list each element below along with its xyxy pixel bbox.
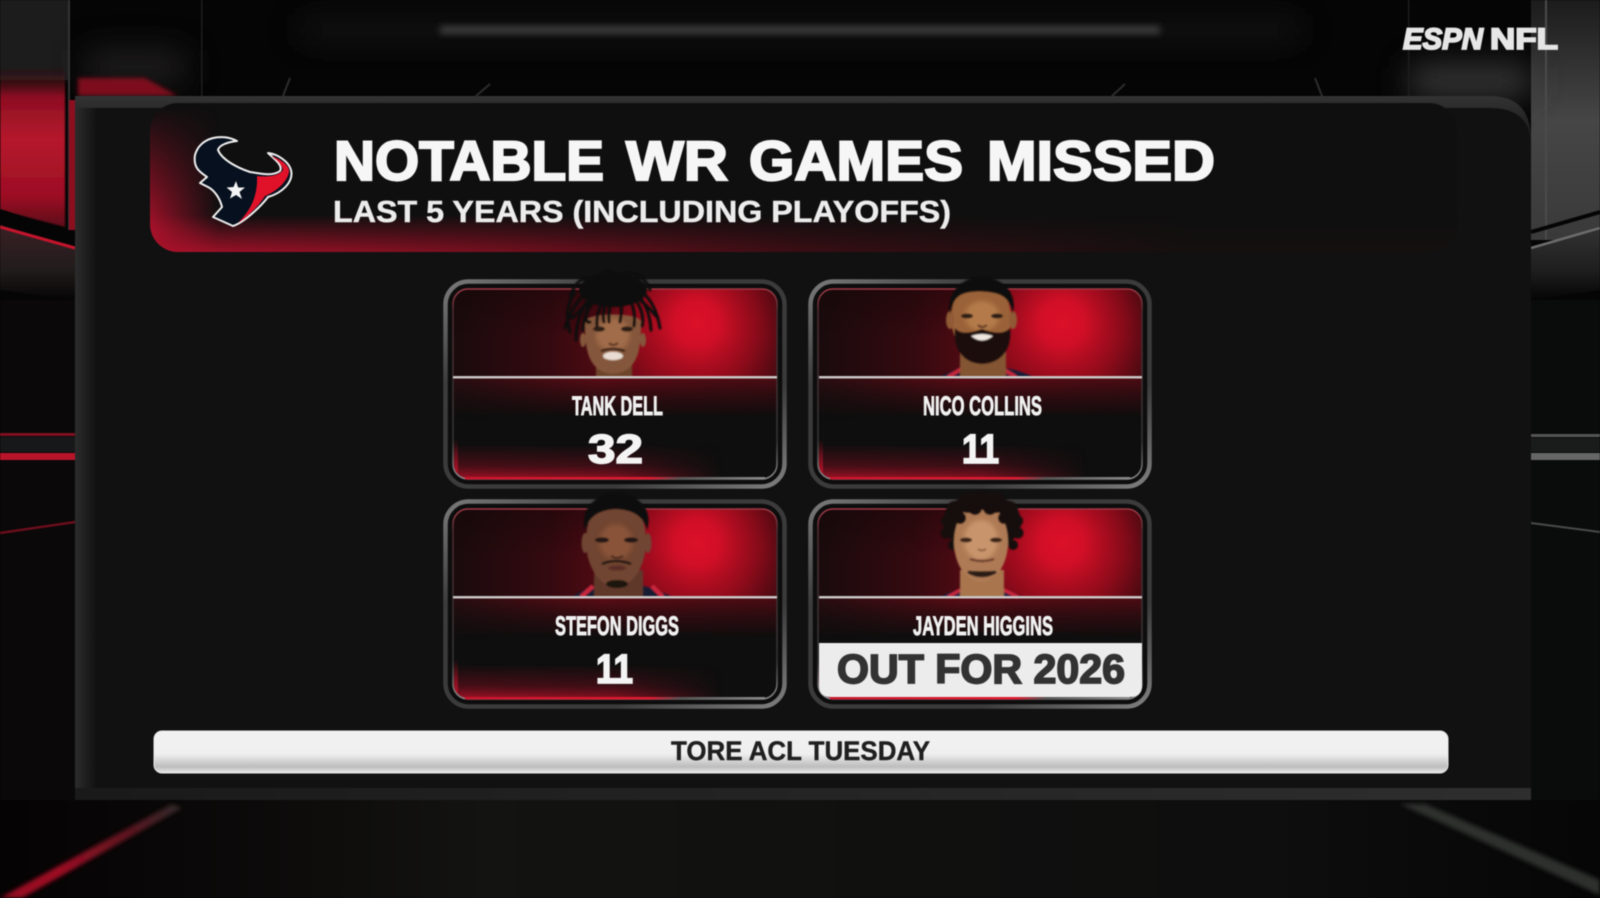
name: JAYDEN HIGGINS (913, 611, 1053, 641)
portrait: Jayden Higgins (940, 492, 1024, 597)
name: NICO COLLINS (923, 391, 1042, 421)
title: MISSED (987, 129, 1215, 192)
logo: ESPN NFL (1403, 23, 1558, 56)
icon: Houston Texans bull logo (195, 137, 291, 226)
panel: main dark board (75, 96, 1531, 800)
footer bar: tore ACL: TORE ACL TUESDAY (671, 736, 930, 766)
games missed: 32 (588, 426, 643, 472)
status box: out for 2026: OUT FOR 2026 (837, 646, 1125, 692)
games missed: 11 (962, 426, 999, 472)
games missed: 11 (596, 646, 633, 692)
name: TANK DELL (572, 391, 663, 421)
panel: Tank Dell card (446, 272, 784, 486)
panel: Nico Collins card (810, 277, 1150, 486)
title: WR (626, 129, 728, 192)
divider (819, 376, 1142, 378)
title (334, 129, 1215, 192)
divider (453, 596, 777, 598)
portrait: Nico Collins (940, 277, 1033, 377)
portrait: Stefon Diggs (572, 493, 672, 597)
subtitle: LAST 5 YEARS (INCLUDING PLAYOFFS) (333, 195, 951, 229)
panel: header banner (150, 103, 1460, 253)
divider (819, 596, 1142, 598)
logo: ESPN NFL: NFL (1490, 23, 1558, 56)
name: STEFON DIGGS (555, 611, 679, 641)
footer bar: tore ACL (154, 731, 1448, 773)
panel: Stefon Diggs card (446, 493, 784, 706)
divider (453, 376, 777, 378)
portrait: Tank Dell (565, 272, 660, 377)
logo: ESPN NFL: ESPN (1403, 23, 1484, 56)
panel: Jayden Higgins card (810, 492, 1150, 706)
title: NOTABLE (334, 129, 604, 192)
title: GAMES (749, 129, 963, 192)
